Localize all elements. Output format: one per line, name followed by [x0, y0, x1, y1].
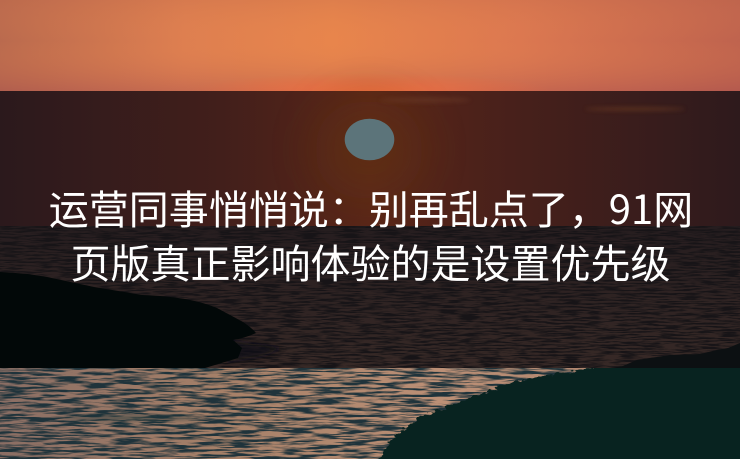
title: 页版真正影响体验的是设置优先级 — [70, 232, 670, 290]
dark sea — [0, 226, 740, 368]
darkened sky band — [0, 91, 740, 226]
sunlit sea — [0, 368, 740, 459]
right far headland silhouette — [612, 343, 740, 368]
sunset sky band — [0, 0, 740, 91]
right foreground headland — [376, 360, 740, 459]
left island silhouette — [0, 272, 283, 368]
title: 运营同事悄悄说：别再乱点了，91网 — [49, 178, 693, 236]
title — [49, 178, 693, 290]
sun — [345, 119, 394, 160]
